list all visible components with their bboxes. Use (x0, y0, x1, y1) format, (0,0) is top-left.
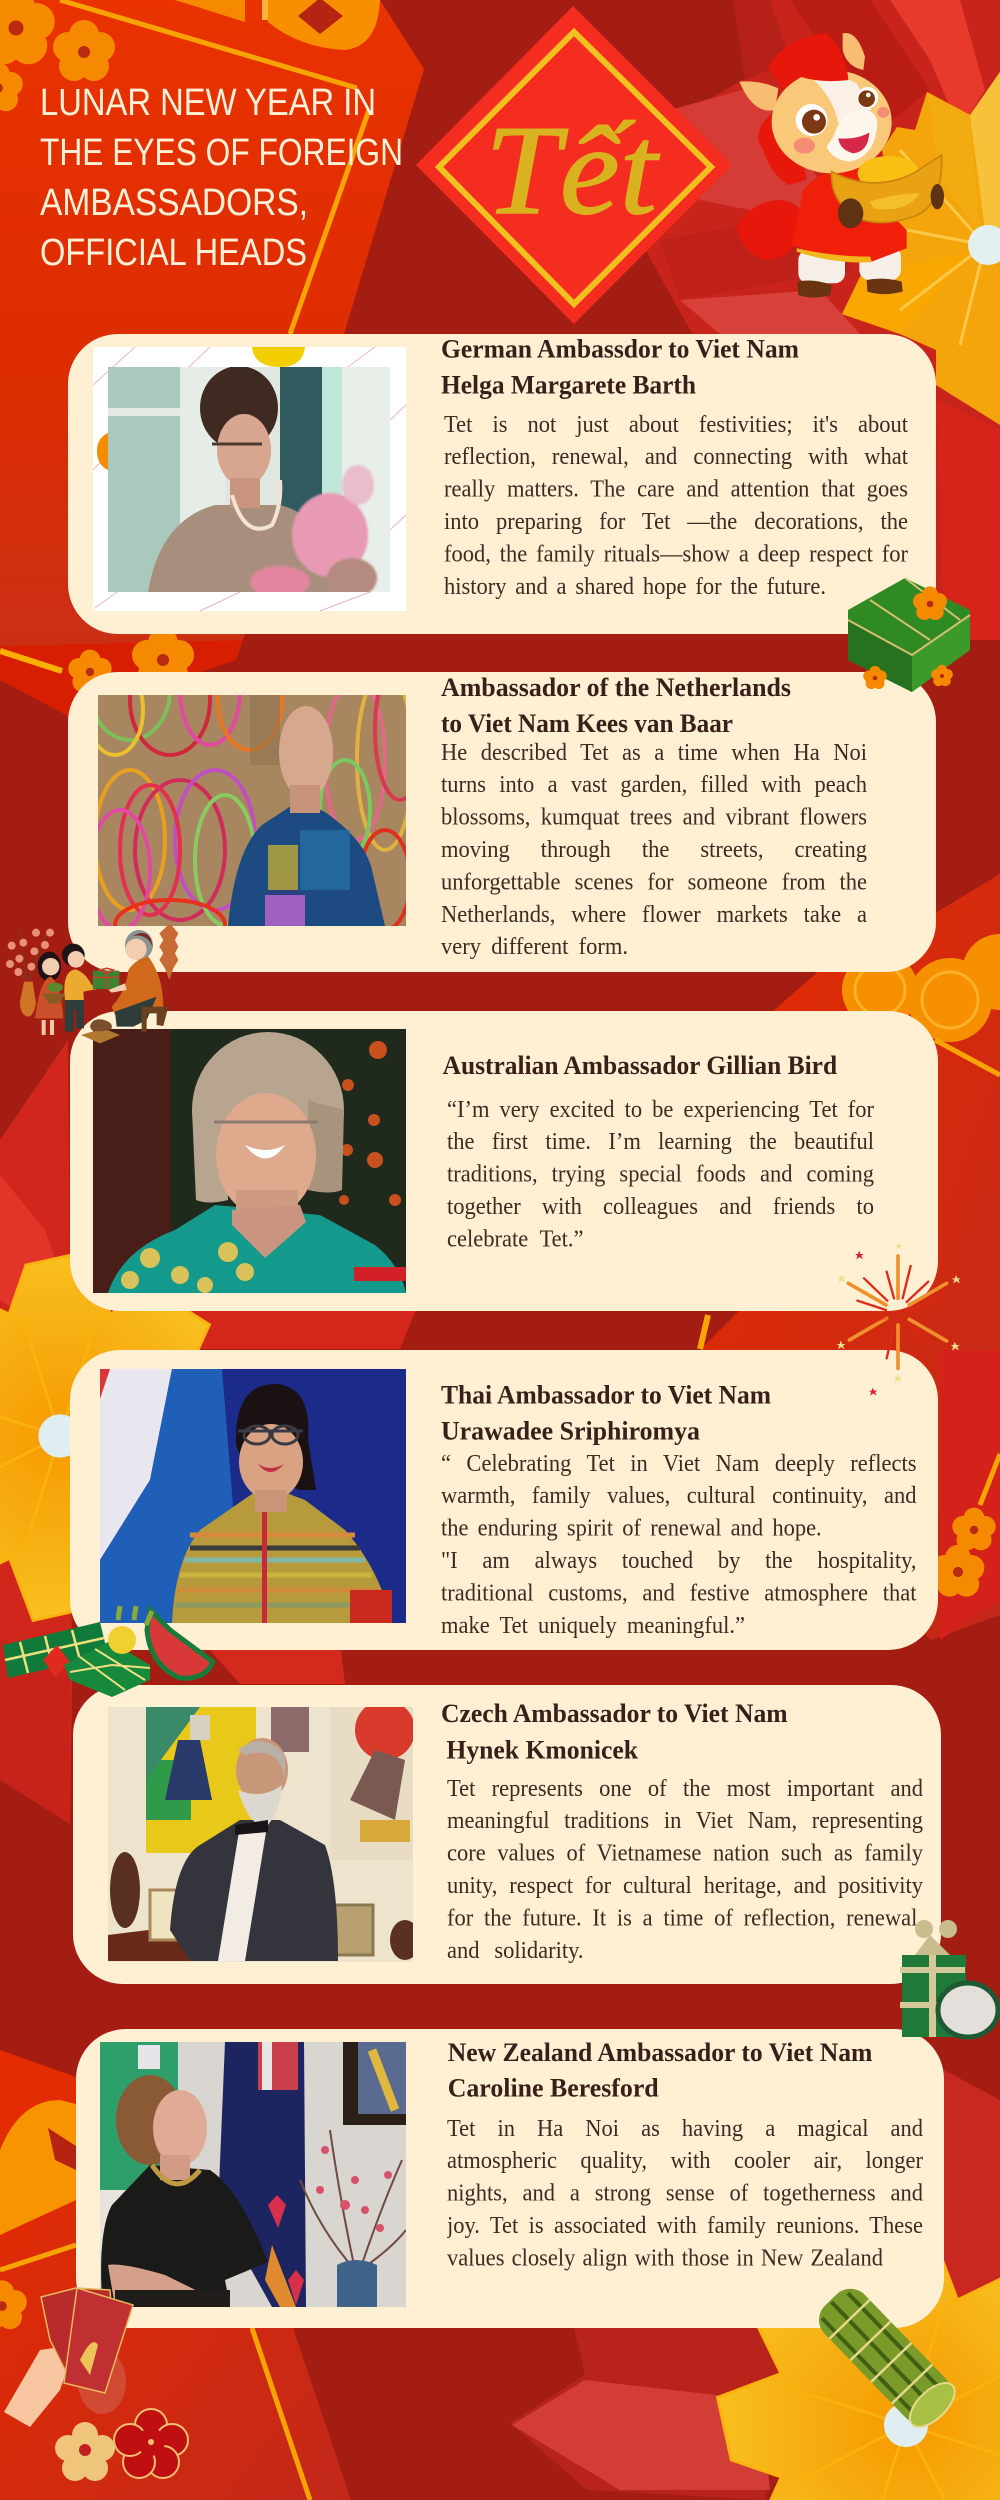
heading (441, 673, 791, 738)
statement text: the enduring spirit of renewal and hope. (441, 1514, 822, 1541)
red fan top right (640, 0, 1000, 640)
title: OFFICIAL HEADS (40, 232, 307, 274)
photo: Caroline Beresford (100, 2042, 406, 2307)
central Tet diamond (416, 6, 732, 324)
red envelope top left (0, 0, 424, 716)
golden flower left (0, 1252, 244, 1620)
icon: banh tet roll (811, 2280, 962, 2434)
icon: firework (837, 1242, 961, 1396)
statement text: He described Tet as a time when Ha Noi (441, 738, 867, 765)
heading (448, 2038, 873, 2103)
statement text: “I’m very excited to be experiencing Tet for (447, 1095, 874, 1122)
heading (441, 1380, 771, 1446)
title: THE EYES OF FOREIGN (40, 132, 403, 174)
statement text (441, 738, 867, 960)
photo: Hynek Kmonicek (108, 1707, 413, 1962)
red fan bottom right (510, 2070, 1000, 2500)
photo: Helga Margarete Barth (108, 367, 390, 592)
red envelope bottom left (0, 2050, 351, 2500)
icon: plum blossoms (55, 2409, 188, 2481)
heading: German Ambassdor to Viet Nam (441, 334, 799, 364)
statement text: traditions, trying special foods and coming (447, 1160, 874, 1187)
icon: horse mascot (737, 33, 944, 297)
statement text: “ Celebrating Tet in Viet Nam deeply reflects (441, 1450, 916, 1477)
statement text: for the future. It is a time of reflection, renewal, (447, 1904, 923, 1931)
icon: banh chung and watermelon (3, 1606, 213, 1697)
heading: New Zealand Ambassador to Viet Nam (448, 2038, 873, 2067)
statement text: and solidarity. (447, 1936, 584, 1963)
photo: Gillian Bird (93, 1029, 406, 1293)
panel: Netherlands ambassador (68, 672, 936, 972)
photo: Kees van Baar (98, 695, 406, 926)
heading (441, 1699, 788, 1764)
statement text: turns into a vast garden, filled with peach (441, 771, 867, 798)
statement text: values closely align with those in New Zealand (447, 2244, 883, 2271)
heading: to Viet Nam Kees van Baar (441, 709, 733, 738)
statement text: celebrate Tet.” (447, 1225, 584, 1252)
statement text: unforgettable scenes for someone from the (441, 868, 867, 895)
statement text (447, 1774, 923, 1963)
red envelope right middle (700, 874, 1000, 1640)
title: LUNAR NEW YEAR IN (40, 82, 376, 124)
heading: Caroline Beresford (448, 2074, 659, 2103)
statement text: Tet represents one of the most important and (447, 1774, 923, 1801)
heading: Hynek Kmonicek (446, 1735, 639, 1764)
statement text: Tet in Ha Noi as having a magical and (447, 2114, 923, 2141)
statement text: food, the family rituals—show a deep respect for (444, 540, 908, 567)
Tet lettering: Tết (485, 99, 661, 241)
panel: German ambassador (68, 334, 936, 634)
statement text: make Tet uniquely meaningful.” (441, 1612, 745, 1639)
heading: Czech Ambassador to Viet Nam (441, 1699, 788, 1728)
statement text: history and a shared hope for the future. (444, 572, 826, 599)
heading: Helga Margarete Barth (441, 370, 697, 400)
statement text: reflection, renewal, and connecting with what (444, 442, 908, 469)
heading: Thai Ambassador to Viet Nam (441, 1380, 771, 1410)
statement text (441, 1450, 916, 1639)
golden flower bottom right (717, 2236, 1000, 2500)
statement text: blossoms, kumquat trees and vibrant flowers (441, 803, 867, 830)
statement text: meaningful traditions in Viet Nam, representing (447, 1806, 923, 1833)
statement text: Tet is not just about festivities; it's about (444, 410, 908, 437)
icon: family exchanging gifts (6, 923, 178, 1043)
photo frame (93, 347, 406, 611)
heading: Urawadee Sriphiromya (441, 1417, 700, 1446)
heading: Australian Ambassador Gillian Bird (443, 1051, 838, 1080)
statement text: into preparing for Tet —the decorations, the (444, 507, 908, 534)
statement text: joy. Tet is associated with family reunions. These (447, 2211, 923, 2238)
icon: gift box top right (848, 578, 970, 692)
flowers top left (0, 0, 194, 692)
statement text (444, 410, 908, 599)
icon: gift and dragon fruit right (900, 1920, 998, 2037)
statement text: really matters. The care and attention that goes (444, 475, 908, 502)
statement text: nights, and a strong sense of togetherness and (447, 2179, 923, 2206)
red fan left middle (0, 1040, 420, 1824)
statement text: "I am always touched by the hospitality, (441, 1547, 916, 1574)
statement text: atmospheric quality, with cooler air, longer (447, 2146, 923, 2173)
gold coins top (175, 0, 380, 50)
statement text: Netherlands, where flower markets take a (441, 901, 867, 928)
statement text (447, 1095, 874, 1252)
statement text: moving through the streets, creating (441, 836, 867, 863)
statement text: together with colleagues and friends to (447, 1193, 874, 1220)
icon: hand with red envelopes (4, 2288, 133, 2427)
heading (441, 334, 799, 400)
golden flower top right (842, 72, 1000, 425)
statement text (447, 2114, 923, 2271)
title: AMBASSADORS, (40, 182, 308, 224)
statement text: warmth, family values, cultural continuity, and (441, 1482, 916, 1509)
statement text: the first time. I’m learning the beautiful (447, 1128, 874, 1155)
statement text: core values of Vietnamese nation such as family (447, 1839, 923, 1866)
panel: New Zealand ambassador (76, 2029, 944, 2328)
panel: Australian ambassador (70, 1011, 938, 1311)
statement text: unity, respect for cultural heritage, and positivity (447, 1871, 923, 1898)
statement text: very different form. (441, 933, 628, 960)
title (40, 82, 403, 274)
statement text: traditional customs, and festive atmosphere that (441, 1579, 916, 1606)
heading: Ambassador of the Netherlands (441, 673, 791, 702)
panel: Czech ambassador (73, 1685, 941, 1984)
panel: Thai ambassador (70, 1350, 938, 1650)
photo: Urawadee Sriphiromya (100, 1369, 406, 1623)
